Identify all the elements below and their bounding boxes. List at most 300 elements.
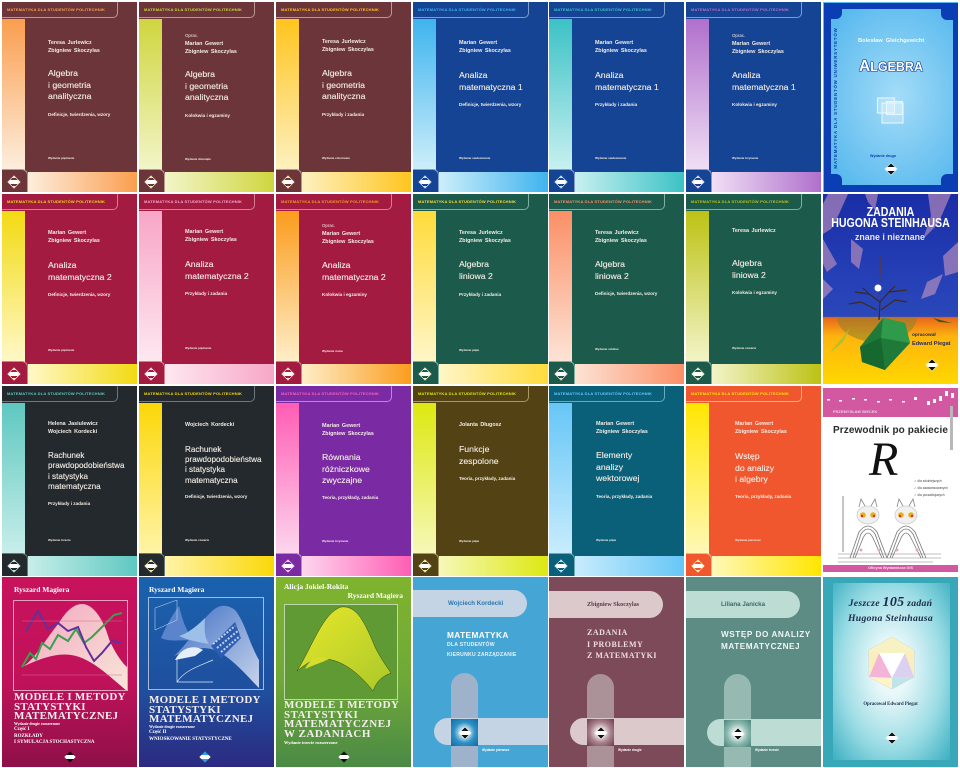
subtitle: Definicje, twierdzenia, wzory [185,494,247,499]
title: i geometria [322,80,365,90]
series band: MATEMATYKA DLA STUDENTÓW POLITECHNIK [418,7,516,12]
authors [185,229,237,243]
title [594,70,659,92]
left strip [413,211,436,362]
title: STATYSTYKI [284,709,358,721]
left strip [276,211,299,362]
title: Rachunek [48,451,84,460]
title: różniczkowe [322,464,370,474]
cover: Analiza matematyczna 1, definicje [413,2,548,192]
authors: Zbigniew Skoczylas [595,48,647,54]
left strip [139,19,162,170]
authors [322,423,374,437]
cover: Rownania rozniczkowe zwyczajne [276,386,411,576]
series band: MATEMATYKA DLA STUDENTÓW POLITECHNIK [691,199,789,204]
series band [276,2,392,18]
authors [322,39,374,53]
authors: Marian Gewert [459,40,497,46]
edition: Wydanie trzecie [755,748,779,752]
cover: Algebra liniowa 2, kolokwia [686,194,821,384]
edition: Wydanie piąte [459,539,479,543]
authors: Zbigniew Skoczylas [732,49,784,55]
cover: Jeszcze 105 zadan Hugona Steinhausa [823,577,958,767]
title: STATYSTYKI [14,701,86,713]
title: i statystyka [48,472,88,481]
bottom strip [165,556,274,576]
edition: Wydanie pierwsze [482,748,509,752]
title: MATEMATYKA [447,630,509,640]
cover: Wstep do analizy i algebry [686,386,821,576]
frame bands [824,3,958,9]
compiler credit [912,332,951,347]
title: MODELE I METODY [14,691,126,703]
cover: Algebra liniowa 2, przyklady [413,194,548,384]
title: matematyczna 2 [322,272,386,282]
authors: Marian Gewert [596,421,634,427]
title [458,259,493,280]
authors: Marian Gewert [595,40,633,46]
cover: Analiza matematyczna 1, przyklady [549,2,684,192]
left strip [413,19,436,170]
edition: Wydanie druga [870,154,896,158]
edition: Wydanie piąte [596,538,616,542]
title: zwyczajne [322,475,362,485]
logo box [276,169,302,192]
title: i geometria [48,80,91,90]
edition: Wydanie siedemnaste [595,156,626,160]
title: Analiza [322,260,350,270]
title [322,452,370,485]
author pill [413,590,527,617]
title: MODELE I METODY [149,694,261,706]
cover: Modele i metody I [2,577,137,767]
authors: Teresa Jurlewicz [595,230,639,236]
title: Przewodnik po pakiecie [833,425,948,436]
logo box [2,361,28,384]
authors: Marian Gewert [732,41,770,47]
bottom strip [302,172,411,192]
title [823,595,958,626]
bottom strip [28,556,137,576]
subtitle: Teoria, przykłady, zadania [322,495,378,500]
title: W ZADANIACH [284,728,371,740]
vertical pill [724,674,751,767]
cover: Matematyka dla studentow kierunku zarzadzanie [413,577,548,767]
left strip [276,403,299,554]
logo box [2,169,28,192]
author: Bolesław Gleichgewicht [858,38,924,44]
series band: MATEMATYKA DLA STUDENTÓW POLITECHNIK [281,199,379,204]
authors: Marian Gewert [185,41,223,47]
title: Analiza [459,70,488,80]
authors [595,40,647,54]
bottom strip [28,172,137,192]
authors [48,230,100,244]
horizontal pill [570,718,684,745]
cover: Elementy analizy wektorowej [549,386,684,576]
title: liniowa 2 [595,270,629,280]
series band [686,194,802,210]
title: zespolone [459,456,499,466]
horizontal pill [434,718,548,745]
subtitle: Przykłady i zadania [48,501,90,506]
series band: MATEMATYKA DLA STUDENTÓW POLITECHNIK [691,7,789,12]
cover: Algebra, Gleichgewicht [823,2,958,192]
cover: Analiza matematyczna 2, definicje [2,194,137,384]
authors: Zbigniew Skoczylas [48,48,100,54]
band chart marks [827,391,954,405]
cover: Zadania Hugona Steinhausa [823,194,958,384]
cover: Modele i metody II [139,577,274,767]
author pill [686,591,800,618]
cover: Przewodnik po pakiecie R [823,386,958,576]
left strip [549,403,572,554]
logo box [413,361,439,384]
authors: Zbigniew Skoczylas [459,238,511,244]
logo box [139,553,165,576]
logo box [549,169,575,192]
author pill: Zbigniew Skoczylas [587,601,639,608]
cover: Wstep do analizy matematycznej [686,577,821,767]
title: STATYSTYKI [149,704,221,716]
part: Część II [149,730,166,735]
left strip [2,19,25,170]
author pill [549,591,663,618]
author: Jolanta Długosz [459,422,501,428]
subtitle: Kolokwia i egzaminy [185,113,230,118]
title: matematyczna 1 [595,82,659,92]
cover: Zadania i problemy z matematyki [549,577,684,767]
title: wektorowej [596,473,639,483]
title [732,258,766,280]
authors: Teresa Jurlewicz [48,40,92,46]
bottom strip [28,364,137,384]
author: Teresa Jurlewicz [732,228,776,234]
title: Elementy [596,450,632,460]
series band: MATEMATYKA DLA STUDENTÓW POLITECHNIK [144,7,242,12]
authors: Zbigniew Skoczylas [595,238,647,244]
edition: Wydanie dziesiąte [185,157,211,161]
authors: Zbigniew Skoczylas [596,429,648,435]
cover: Algebra i geometria analityczna, definicje [2,2,137,192]
center square [451,719,478,746]
bottom strip [575,556,684,576]
authors [459,40,511,54]
logo box [686,553,712,576]
edition: Wydanie piąte [459,348,479,352]
left strip [139,211,162,362]
title [587,627,657,662]
series band [2,2,118,18]
authors: Zbigniew Skoczylas [48,238,100,244]
edition: Wydanie drugie rozszerzone [149,725,195,729]
authors [185,33,237,55]
authors [48,421,98,435]
subtitle: KIERUNKU ZARZĄDZANIE [447,652,517,658]
title: Jeszcze 105 zadań [849,595,932,610]
part: I SYMULACJA STOCHASTYCZNA [14,740,94,745]
title [596,450,639,483]
title: matematyczna [185,476,238,485]
scroll mark [950,406,953,450]
title: Równania [322,452,361,462]
subtitle: Kolokwia i egzaminy [732,290,777,295]
title: MATEMATYCZNEJ [149,713,253,725]
edition: Wydanie trzecie [48,538,71,542]
title [48,451,125,491]
series band [549,386,665,402]
series band [2,386,118,402]
title [184,259,249,280]
series band [549,2,665,18]
series band [686,2,802,18]
title: MODELE I METODY [284,699,399,711]
authors: Oprac. [185,33,198,38]
series band: MATEMATYKA DLA STUDENTÓW POLITECHNIK [554,391,652,396]
title [732,70,796,92]
edition: Wydanie piętnaste [185,346,211,350]
author: Wojciech Kordecki [185,422,234,428]
subtitle: Przykłady i zadania [459,292,501,297]
author: PRZEMYSŁAW BIECEK [833,410,877,414]
vertical pill [451,673,478,767]
title [459,444,499,466]
left strip [2,403,25,554]
bottom strip [712,556,821,576]
center square [587,719,614,746]
edition: Wydanie czwarte [732,346,756,350]
title [48,68,92,101]
title [594,259,629,280]
compiler credit: Edward Piegat [912,341,951,347]
subtitle: Teoria, przykłady, zadania [459,476,515,481]
authors: Zbigniew Skoczylas [322,431,374,437]
title [14,693,126,722]
subtitle: Kolokwia i egzaminy [732,102,777,107]
cover: Algebra i geometria analityczna, przyklady [276,2,411,192]
subtitle: Przykłady i zadania [595,102,637,107]
left strip [549,19,572,170]
authors [732,33,784,55]
audience list: ✓ dla zdolniejszych ✓ dla zaawansowanych ✓ dla poczatkujacych [914,479,948,497]
edition: Wydanie czternaste [322,156,350,160]
bottom strip [575,172,684,192]
title: analityczna [48,91,91,101]
left strip [276,19,299,170]
author: Ryszard Magiera [149,585,204,594]
title: ALGEBRA [859,58,923,75]
authors [595,230,647,244]
series band: MATEMATYKA DLA STUDENTÓW POLITECHNIK [7,391,105,396]
left strip [686,403,709,554]
authors: Marian Gewert [322,231,360,237]
series band [413,386,529,402]
cover: Modele i metody w zadaniach [276,577,411,767]
part [149,730,232,743]
left strip [686,211,709,362]
title: MATEMATYCZNEJ [721,642,800,650]
authors: Marian Gewert [322,423,360,429]
bottom strip [712,172,821,192]
compiler credit: opracował [912,333,936,338]
top band [823,388,958,417]
edition: Wydanie trzynaste [322,539,348,543]
illustration: tree on polyhedron [830,256,952,370]
authors: Teresa Jurlewicz [322,39,366,45]
left strip [2,211,25,362]
authors: Marian Gewert [185,229,223,235]
authors: Wojciech Kordecki [48,429,97,435]
subtitle [447,641,517,660]
authors [596,421,648,435]
bottom band: Oficyna Wydawnicza GiS [868,566,913,570]
series band [276,194,392,210]
title: prawdopodobieństwa [185,455,262,464]
edition: Wydanie trzynaste [732,156,758,160]
bottom strip [439,364,548,384]
subtitle: Teoria, przykłady, zadania [596,494,652,499]
title: Algebra [732,258,762,268]
bottom strip [712,364,821,384]
vertical series text: MATEMATYKA DLA STUDENTÓW UNIWERSYTETÓW [833,27,838,169]
author two: Ryszard Magiera [348,591,403,600]
series band: MATEMATYKA DLA STUDENTÓW POLITECHNIK [144,391,242,396]
left strip [686,19,709,170]
logo box [686,169,712,192]
logo box [413,553,439,576]
series band [686,386,802,402]
cover: Rachunek prawdopodobienstwa, przyklady [2,386,137,576]
logo [886,732,898,744]
edition: Wydanie piętnaste [48,348,74,352]
logo box [139,361,165,384]
title: ZADANIA [587,628,628,637]
edition: Wydanie siedemnaste [459,156,490,160]
title [831,204,950,231]
cover: Algebra i geometria analityczna, kolokwia [139,2,274,192]
center square [724,720,751,747]
illustration frame [284,604,398,700]
subtitle: Definicje, twierdzenia, wzory [48,292,110,297]
author pill: Liliana Janicka [721,601,765,608]
corner blocks [941,3,958,20]
left strip [549,211,572,362]
icon: polyhedron [868,636,916,690]
authors: Oprac. [732,33,745,38]
authors: Zbigniew Skoczylas [185,237,237,243]
logo box [549,361,575,384]
edition: Wydanie piętnaste [48,156,74,160]
title: Analiza [48,260,76,270]
horizontal pill [707,719,821,746]
subtitle: znane i nieznane [855,232,925,242]
authors: Zbigniew Skoczylas [459,48,511,54]
series band [276,386,392,402]
title: matematyczna [48,482,101,491]
title: matematyczna 2 [185,270,249,280]
title: Funkcje [459,444,489,454]
title: Hugona Steinhausa [848,613,933,624]
logo [885,163,897,175]
title: matematyczna 1 [459,82,523,92]
series band: MATEMATYKA DLA STUDENTÓW POLITECHNIK [554,7,652,12]
subtitle: Przykłady i zadania [322,112,364,117]
series band [549,194,665,210]
part [14,727,94,746]
title: MATEMATYCZNEJ [14,710,118,722]
cover: Algebra liniowa 2, definicje [549,194,684,384]
author pill: Wojciech Kordecki [448,600,503,607]
title [322,260,386,282]
title: Analiza [732,70,760,80]
title: analityczna [185,92,228,102]
edition: Wydanie pierwsze [735,538,761,542]
authors: Zbigniew Skoczylas [322,47,374,53]
title: HUGONA STEINHAUSA [831,216,950,231]
subtitle: Przykłady i zadania [185,291,227,296]
compiler credit: Opracował Edward Piegat [863,702,918,707]
authors: Zbigniew Skoczylas [185,49,237,55]
logo [338,751,350,763]
title [322,68,366,101]
title: Algebra [322,68,352,78]
author: Ryszard Magiera [14,585,69,594]
bottom strip [165,364,274,384]
title: do analizy [735,462,774,472]
authors [459,230,511,244]
cover: Rachunek prawdopodobienstwa, definicje [139,386,274,576]
title [284,701,399,739]
logo [926,359,938,371]
bottom band [823,565,958,572]
series band [2,194,118,210]
authors: Oprac. [322,223,335,228]
edition: Wydanie trzecie rozszerzone [284,740,337,745]
series band [413,2,529,18]
title: analizy [596,462,623,472]
icon: overlapping squares [876,97,904,124]
illustration frame [13,600,128,691]
series band [139,2,255,18]
logo [459,727,471,739]
inner panel [833,583,950,760]
title: Analiza [185,259,214,269]
part: WNIOSKOWANIE STATYSTYCZNE [149,736,232,742]
authors: Marian Gewert [735,421,773,427]
series band: MATEMATYKA DLA STUDENTÓW POLITECHNIK [691,391,789,396]
authors: Helena Jasiulewicz [48,421,98,427]
series band: MATEMATYKA DLA STUDENTÓW POLITECHNIK [7,7,105,12]
subtitle: Kolokwia i egzaminy [322,292,367,297]
bottom strip [165,172,274,192]
title: ZADANIA [867,204,914,220]
subtitle: Definicje, twierdzenia, wzory [459,102,521,107]
subtitle: Definicje, twierdzenia, wzory [595,291,657,296]
title [458,70,523,92]
series band: MATEMATYKA DLA STUDENTÓW POLITECHNIK [418,199,516,204]
subtitle: Definicje, twierdzenia, wzory [48,112,110,117]
logo box [2,553,28,576]
logo [64,751,76,763]
series band: MATEMATYKA DLA STUDENTÓW POLITECHNIK [281,7,379,12]
illustration: chart with cats [833,494,958,569]
vertical pill [587,674,614,767]
logo [199,751,211,763]
cover: Analiza matematyczna 2, kolokwia [276,194,411,384]
bottom strip [302,556,411,576]
series band: MATEMATYKA DLA STUDENTÓW POLITECHNIK [554,199,652,204]
authors: Marian Gewert [48,230,86,236]
